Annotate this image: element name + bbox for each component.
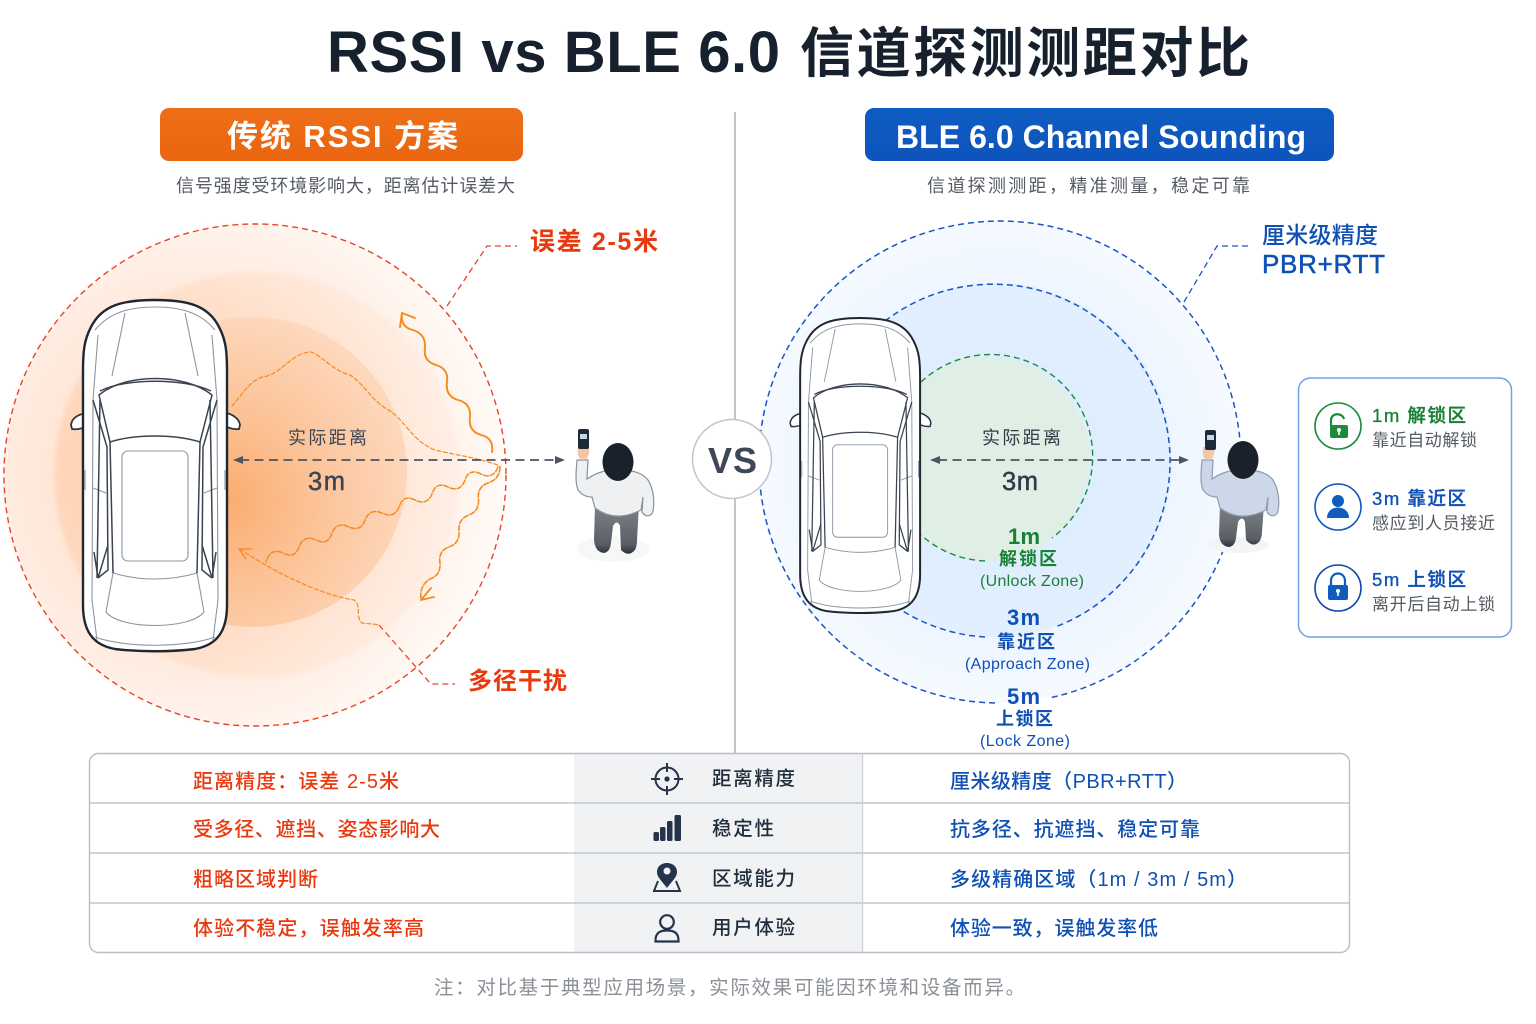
approach zone ring [885,284,1170,637]
heading: BLE pill: BLE 6.0 Channel Sounding [896,119,1306,155]
icon: crosshair [651,763,683,795]
row: precision: 距离精度 [712,768,795,790]
approach zone label: 3m [1007,605,1040,630]
VS badge: VS [708,440,757,481]
center divider [734,112,736,753]
heading: BLE pill [865,108,1334,161]
row: experience: 用户体验 [712,917,795,939]
title: 信道探测测距对比 [800,24,1250,84]
row: precision [193,763,1187,795]
left distance value: 3m [308,468,345,496]
row: experience [193,915,1158,942]
BLE subtitle: 信道探测测距，精准测量，稳定可靠 [927,176,1250,196]
legend item: lock [1315,565,1495,614]
legend item: unlock: 1m 解锁区 [1372,405,1466,426]
footnote: 注：对比基于典型应用场景，实际效果可能因环境和设备而异。 [434,977,1025,999]
legend item: approach [1315,484,1495,533]
signal noise zones [4,224,506,726]
right distance arrow [930,456,1189,464]
title: RSSI vs BLE 6.0 [327,20,780,85]
row: zones: 区域能力 [712,868,795,890]
heading: RSSI pill: 传统 RSSI 方案 [227,119,458,154]
heading: RSSI pill [160,108,523,161]
legend item: unlock: 靠近自动解锁 [1372,431,1477,450]
legend item: lock: 5m 上锁区 [1372,569,1466,590]
title [327,20,1250,85]
zone fills [757,221,1239,703]
row: zones: 粗略区域判断 [193,868,318,891]
callout: centimeter precision: 厘米级精度 [1262,222,1378,248]
row: zones: 多级精确区域（1m / 3m / 5m） [950,868,1247,891]
row: stability: 受多径、遮挡、姿态影响大 [193,818,440,841]
row: precision: 距离精度：误差 2-5米 [193,770,399,793]
right distance value: 3m [1002,468,1038,496]
approach zone label: 靠近区 [997,632,1055,652]
row: stability [193,815,1200,841]
RSSI subtitle: 信号强度受环境影响大，距离估计误差大 [176,176,515,196]
callout: centimeter precision [1184,222,1385,302]
row: zones [193,863,1247,891]
row: experience: 体验不稳定，误触发率高 [193,917,424,940]
error range circle [4,224,506,726]
right distance label: 实际距离 [982,428,1061,448]
left distance label: 实际距离 [288,428,367,448]
lock zone label [980,684,1070,750]
unlock zone ring [921,354,1093,561]
panel: RSSI diagram [4,108,658,726]
icon: map pin [654,863,680,891]
left car [71,300,240,651]
unlock zone label [980,524,1084,590]
row: precision: 厘米级精度（PBR+RTT） [950,770,1187,793]
approach zone label [965,605,1090,673]
lock zone label: 5m [1007,684,1040,709]
approach zone label: (Approach Zone) [965,656,1090,673]
callout: centimeter precision: PBR+RTT [1262,249,1385,279]
legend item: approach: 3m 靠近区 [1372,488,1466,509]
row: stability: 稳定性 [712,818,774,840]
unlock zone label: 1m [1008,524,1040,549]
row: experience: 体验一致，误触发率低 [950,917,1158,940]
icon: signal bars [654,815,681,841]
left person with phone [576,429,654,562]
callout: error range: 误差 2-5米 [530,228,658,256]
VS badge [692,420,772,498]
callout: error range [447,228,658,306]
unlock zone label: 解锁区 [999,549,1057,569]
right person with phone [1201,430,1279,553]
unlock zone label: (Unlock Zone) [980,573,1084,590]
comparison table [90,754,1350,952]
right car [790,318,931,613]
multipath signal waves [232,313,500,625]
callout: multipath: 多径干扰 [468,668,567,695]
panel: zone legend [1298,378,1512,637]
panel: BLE diagram [757,108,1385,750]
legend item: lock: 离开后自动上锁 [1372,595,1495,614]
left distance arrow [233,456,565,464]
icon: user [655,915,679,942]
callout: multipath [379,625,567,695]
legend item: approach: 感应到人员接近 [1372,514,1495,533]
legend item: unlock [1315,403,1477,450]
row: stability: 抗多径、抗遮挡、稳定可靠 [950,818,1200,841]
lock zone ring [759,221,1240,703]
lock zone label: 上锁区 [996,709,1053,729]
lock zone label: (Lock Zone) [980,733,1070,750]
